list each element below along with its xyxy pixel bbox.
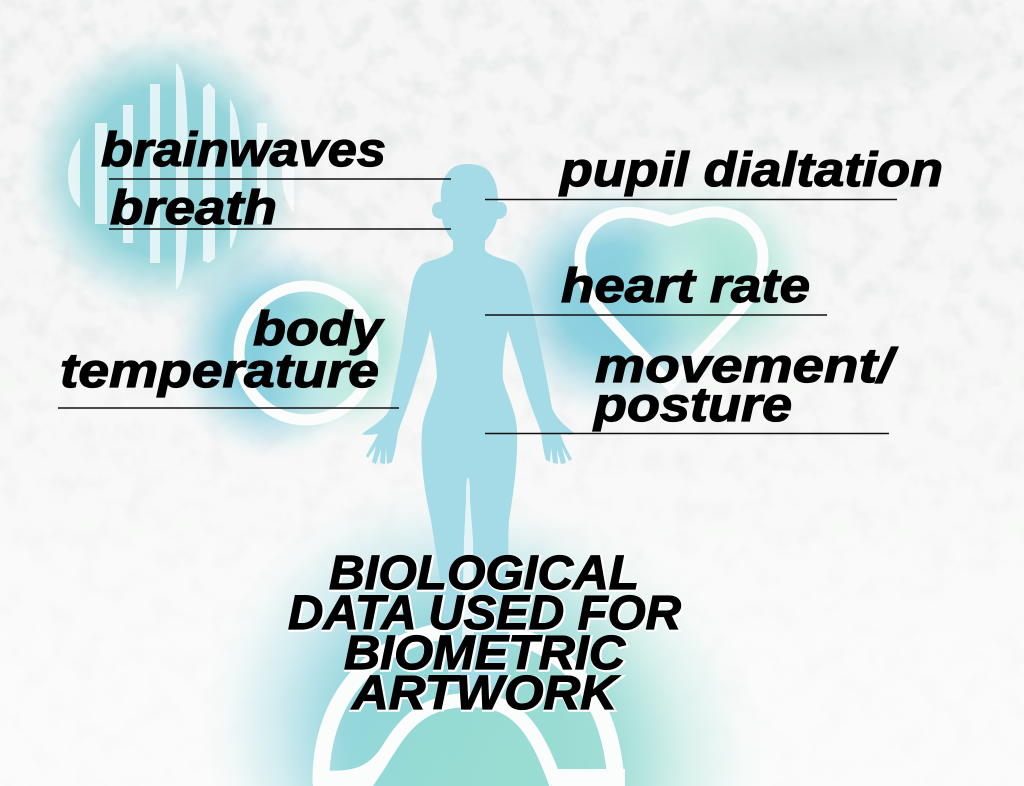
title: BIOLOGICAL bbox=[330, 548, 640, 601]
title: BIOMETRIC bbox=[344, 627, 626, 680]
title: ARTWORK bbox=[351, 667, 621, 720]
leg gap bbox=[462, 478, 474, 640]
label: movement/posture: posture bbox=[592, 379, 792, 432]
title: ARTWORK bbox=[352, 668, 622, 721]
label: heart rate: heart rate bbox=[561, 260, 810, 313]
label: pupil dialtation: pupil dialtation bbox=[558, 144, 943, 197]
label: movement/posture bbox=[592, 340, 898, 432]
title: BIOLOGICAL bbox=[329, 547, 639, 600]
title: DATA USED FOR bbox=[289, 588, 682, 641]
title bbox=[288, 547, 682, 721]
title: DATA USED FOR bbox=[288, 587, 681, 640]
label: movement/posture: movement/ bbox=[595, 340, 898, 393]
glow: brainwaves bbox=[22, 28, 306, 316]
connector lines bbox=[58, 179, 897, 434]
title: BIOMETRIC bbox=[345, 628, 627, 681]
icon: bottom arch outline bbox=[313, 629, 625, 786]
icon: thermometer circle outline bbox=[239, 286, 373, 420]
label: body temperature: body bbox=[253, 303, 385, 356]
label: brainwaves: brainwaves bbox=[101, 124, 386, 177]
icon: brainwave bars bbox=[68, 63, 294, 290]
glow: heart bbox=[495, 170, 820, 420]
human body silhouette bbox=[362, 164, 574, 690]
icon: heart outline bbox=[580, 212, 763, 385]
label: breath: breath bbox=[110, 182, 277, 235]
label: body temperature bbox=[60, 303, 385, 398]
label: body temperature: temperature bbox=[60, 345, 379, 398]
glow: body temperature bbox=[170, 235, 430, 460]
glow: bottom bbox=[205, 485, 765, 786]
